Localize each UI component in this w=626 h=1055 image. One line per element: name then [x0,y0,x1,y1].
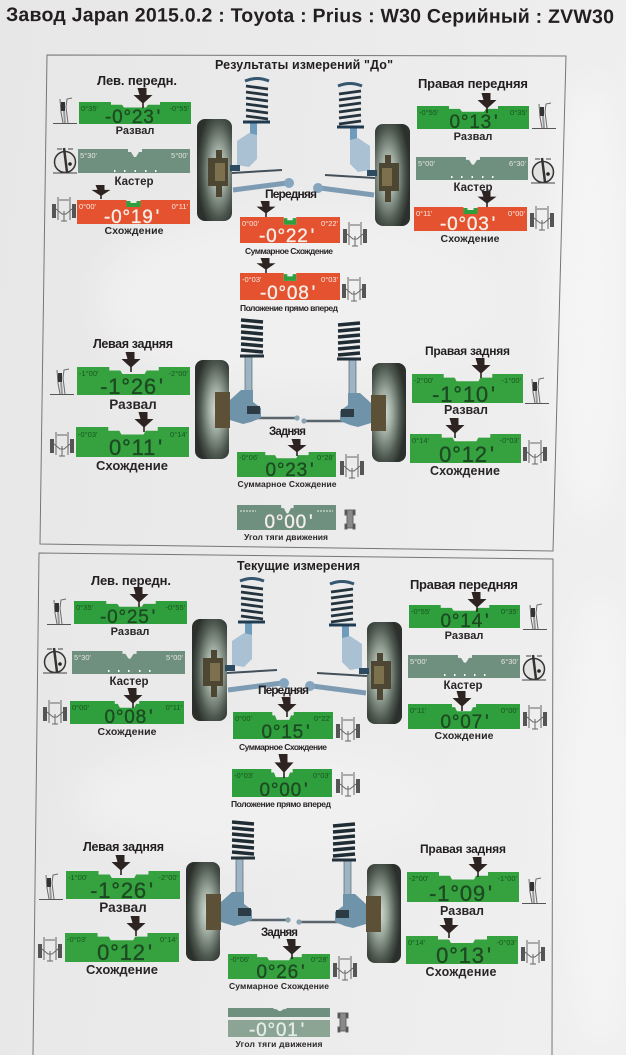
gauge: left rear camber: -1°26' [100,374,164,399]
gauge: left rear toe: Схождение [96,458,168,473]
gauge: front total toe: 0°00' [242,219,260,228]
gauge: right rear toe: 0°12' [439,442,495,467]
gauge: front straight-ahead position, current: 0°00' [260,780,308,801]
gauge: left front toe: -0°19' [104,207,160,228]
gauge: left front toe, current: 0°11' [166,703,183,712]
gauge: front straight-ahead position: -0°08' [260,283,316,304]
gauge: right front camber, current: Развал [445,630,483,642]
gauge: left front camber, current: Лев. передн. [91,573,171,588]
gauge: left front camber: -0°23' [105,107,161,128]
gauge: rear total toe [237,426,364,489]
gauge: right front caster: 6°30' [509,159,527,168]
gauge: right front caster, current: Кастер [443,680,483,692]
gauge: left front caster: Кастер [114,176,154,188]
gauge: thrust angle [237,505,355,542]
gauge: right rear camber, current: -1°00' [498,874,518,883]
gauge: left front toe: 0°11' [172,202,189,211]
gauge: left rear camber: Левая задняя [93,337,173,351]
gauge: left rear toe, current: 0°14' [160,935,178,944]
gauge: right front toe, current: 0°07' [441,712,489,733]
gauge: rear total toe: 0°23' [266,460,314,481]
gauge: left rear camber, current: -2°00' [159,873,179,882]
gauge: right rear camber: -1°10' [432,382,496,407]
gauge: right front toe, current [408,691,547,742]
gauge: right front camber, current: Правая передняя [410,577,518,592]
gauge: left front toe: 0°00' [79,202,97,211]
gauge: left front camber: 0°35' [81,104,99,113]
gauge: right front camber: -0°55' [419,108,439,117]
gauge: right rear camber: -2°00' [414,376,434,385]
gauge: right rear toe: Схождение [430,464,500,478]
gauge: left rear toe: -0°03' [78,430,98,439]
gauge: front total toe, current: Передняя [258,683,309,697]
gauge: right front caster: 5°00' [418,159,436,168]
gauge: front straight-ahead position: Положение прямо вперед [240,303,339,313]
gauge: front straight-ahead position, current: 0°03' [313,771,331,780]
gauge: rear total toe: -0°06' [239,453,259,462]
gauge: right front camber: Развал [454,131,492,143]
gauge: left front camber, current: Развал [111,626,149,638]
gauge: left rear toe: 0°11' [109,435,163,460]
gauge: right rear camber, current: -2°00' [409,874,429,883]
gauge: rear total toe: Суммарное Схождение [238,479,337,489]
gauge: thrust angle: Угол тяги движения [244,532,328,542]
gauge: right rear camber [412,344,549,417]
gauge: left front camber: Развал [116,125,154,137]
gauge: left rear camber, current: Развал [99,900,147,915]
gauge: front straight-ahead position, current [231,754,360,809]
gauge: right front camber, current [409,577,547,642]
gauge: left rear toe, current [38,916,179,977]
gauge: left front toe, current: 0°00' [72,703,90,712]
gauge: left front caster: 5°30' [80,151,98,160]
gauge: front total toe, current: 0°22' [314,714,332,723]
gauge: front total toe: -0°22' [259,226,315,247]
gauge: left rear camber: -2°00' [169,369,189,378]
gauge: rear total toe, current: 0°28' [311,955,329,964]
front suspension illustration, before [197,78,410,226]
gauge: left front toe, current: 0°08' [105,707,153,728]
gauge: left front caster, current: Кастер [109,676,149,688]
gauge: right rear camber: Правая задняя [425,344,510,358]
gauge: thrust angle, current: Угол тяги движения [236,1039,323,1049]
gauge: right front camber, current: 0°14' [441,611,489,632]
gauge: right front caster: Кастер [453,182,493,194]
heading: results before: Результаты измерений "До" [215,58,393,72]
gauge: rear total toe, current [228,927,357,991]
gauge: right rear toe, current: -0°03' [497,938,517,947]
gauge: left front camber: Лев. передн. [97,73,177,88]
gauge: right rear toe [410,418,547,478]
gauge: right rear toe, current: 0°13' [436,943,492,968]
gauge: right front camber: Правая передняя [418,76,528,91]
rear suspension illustration, before [195,320,406,462]
gauge: left rear toe, current: -0°03' [67,935,87,944]
rear suspension illustration, current [186,822,401,963]
gauge: front total toe: Передняя [265,187,317,201]
gauge: left rear camber, current: -1°00' [68,873,88,882]
gauge: right rear camber: -1°00' [502,376,522,385]
gauge: right front camber, current: -0°55' [411,607,431,616]
gauge: left rear camber, current: -1°26' [90,878,154,903]
gauge: right rear toe, current: 0°14' [408,938,426,947]
panel: current measurements [33,553,553,1055]
gauge: right rear toe, current: Схождение [426,965,497,979]
gauge: right front caster, current [408,655,546,692]
gauge: left front caster [53,148,190,188]
gauge: left rear camber, current: Левая задняя [83,840,164,854]
gauge: left front toe, current: Схождение [98,726,157,738]
gauge: left rear toe, current: Схождение [86,962,158,977]
panel: measurement results before [40,55,566,551]
gauge: right front toe: 0°00' [508,209,526,218]
gauge: front total toe, current: 0°15' [262,722,310,743]
gauge: left front toe, current [43,688,184,738]
gauge: right front caster [416,157,555,194]
gauge: right front camber: 0°35' [510,108,528,117]
gauge: rear total toe, current: -0°06' [230,955,250,964]
gauge: left front camber: -0°55' [170,104,190,113]
gauge: left rear camber [50,337,190,412]
gauge: rear total toe, current: Суммарное Схождение [229,981,329,991]
gauge: right rear toe: -0°03' [500,436,520,445]
gauge: left front caster, current [43,648,185,688]
gauge: front total toe, current [233,683,360,752]
gauge: thrust angle: 0°00' [265,512,313,533]
gauge: front straight-ahead position, current: Положение прямо вперед [231,799,332,809]
gauge: left rear toe: 0°14' [170,430,188,439]
gauge: right front camber, current: 0°35' [501,607,519,616]
gauge: left front caster, current: 5°00' [166,653,184,662]
gauge: right front toe: -0°03' [440,214,496,235]
gauge: front straight-ahead position, current: -0°03' [234,771,254,780]
gauge: right front toe, current: 0°11' [410,706,427,715]
gauge: left front toe: Схождение [104,225,164,237]
gauge: front straight-ahead position: 0°03' [321,275,339,284]
gauge: left front camber, current: -0°25' [100,607,156,628]
gauge: left front caster, current: 5°30' [74,653,92,662]
gauge: right front toe [414,191,554,245]
gauge: front total toe, current: 0°00' [235,714,253,723]
gauge: right front toe, current: 0°00' [501,706,519,715]
gauge: right rear camber, current [407,842,546,918]
gauge: rear total toe, current: 0°26' [257,962,305,983]
gauge: front total toe, current: Суммарное Схождение [239,742,327,752]
gauge: left rear camber: -1°00' [79,369,99,378]
gauge: right rear camber: Развал [444,403,488,417]
gauge: front straight-ahead position: -0°03' [242,275,262,284]
gauge: right front camber [417,76,556,143]
gauge: left front caster: 5°00' [171,151,189,160]
gauge: right front caster, current: 5°00' [410,657,428,666]
gauge: left rear camber, current [39,840,180,915]
gauge: right rear camber, current: -1°09' [429,881,493,906]
gauge: thrust angle, current: -0°01' [249,1020,305,1041]
gauge: rear total toe: Задняя [269,426,306,438]
gauge: thrust angle, current [228,1008,348,1049]
gauge: right rear toe: 0°14' [412,436,430,445]
gauge: left front camber, current: -0°55' [166,603,186,612]
title: Завод Japan 2015.0.2 : Toyota : Prius : W30 Серийный : ZVW30 [6,4,614,28]
gauge: front total toe: Суммарное Схождение [245,246,333,256]
gauge: left front camber, current [47,573,187,638]
gauge: right rear camber, current: Развал [440,904,484,918]
gauge: left rear toe, current: 0°12' [97,940,153,965]
gauge: left rear camber: Развал [109,397,157,412]
gauge: front total toe [240,187,367,256]
gauge: left front camber [53,73,191,137]
gauge: left front camber, current: 0°35' [76,603,94,612]
gauge: right rear toe, current [406,918,545,979]
gauge: right front toe: Схождение [440,233,500,245]
gauge: front straight-ahead position [240,258,366,313]
gauge: right rear camber, current: Правая задняя [420,842,506,856]
gauge: right front caster, current: 6°30' [501,657,519,666]
gauge: right front toe: 0°11' [416,209,433,218]
gauge: right front toe, current: Схождение [434,730,494,742]
gauge: front total toe: 0°22' [321,219,339,228]
gauge: left front toe [52,185,190,237]
gauge: left rear toe [50,412,189,473]
gauge: right front camber: 0°13' [450,112,498,133]
front suspension illustration, current [192,578,402,724]
heading: current measurements: Текущие измерения [237,559,360,573]
gauge: rear total toe, current: Задняя [261,927,298,939]
gauge: rear total toe: 0°28' [317,453,335,462]
